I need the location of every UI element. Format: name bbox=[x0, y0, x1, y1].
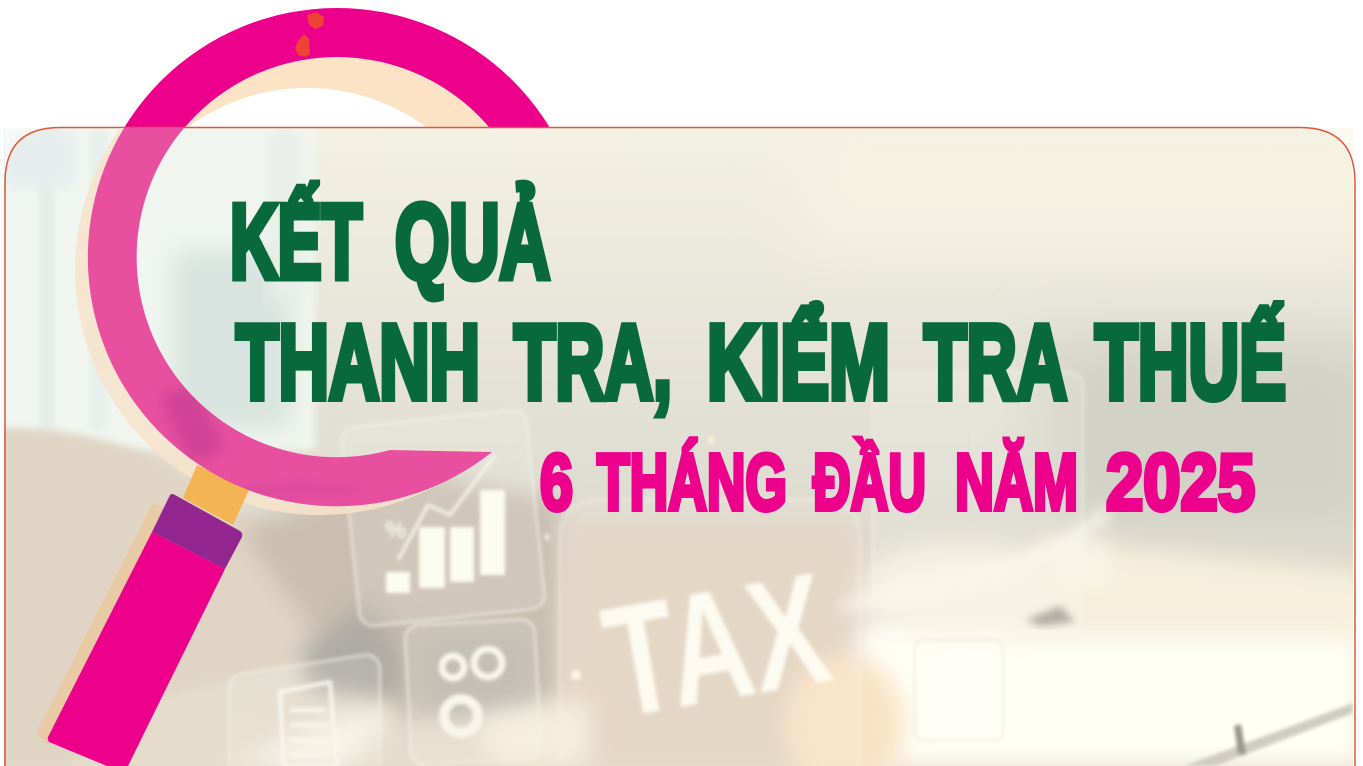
handle body bbox=[48, 532, 225, 766]
handle shadow bbox=[36, 503, 170, 745]
glass icon: chart card bbox=[340, 409, 546, 627]
subtitle bbox=[540, 438, 1255, 526]
glass icon: document card bbox=[229, 655, 380, 766]
photo: warm top right tone bbox=[800, 120, 1363, 250]
photo: brown tones behind tax card bbox=[560, 520, 860, 766]
magnifier ring top: pink band bbox=[124, 8, 550, 127]
magnifier shadow inside panel bbox=[75, 128, 486, 516]
title line 2: THANH bbox=[236, 304, 480, 422]
photo: white light at bottom left bbox=[230, 705, 400, 766]
panel corner tint bbox=[4, 128, 1353, 183]
clipboard edge bbox=[1184, 703, 1353, 766]
photo: pale window at left bbox=[0, 120, 315, 450]
subtitle: 2025 bbox=[1106, 438, 1255, 526]
magnifier ring inside panel bbox=[88, 128, 492, 506]
glass icon: gears card bbox=[404, 619, 542, 765]
blurred dark binder detail bbox=[1026, 606, 1075, 626]
subtitle: ĐẦU bbox=[813, 438, 926, 526]
rising glow line and bars bbox=[840, 505, 1110, 612]
subtitle: THÁNG bbox=[597, 438, 787, 526]
photo: grey wall at right bbox=[1040, 340, 1363, 530]
photo: dark mid shadows bbox=[240, 470, 560, 720]
title line 2 bbox=[236, 304, 1286, 422]
title line 2: KIỂM bbox=[707, 304, 890, 422]
subtitle: NĂM bbox=[955, 438, 1078, 526]
title line 2: TRA, bbox=[514, 304, 672, 422]
tax lettering: TAX bbox=[592, 540, 841, 752]
handle collar bbox=[152, 494, 242, 569]
title line 1 bbox=[230, 182, 550, 301]
red paint marks on ring bbox=[295, 12, 324, 57]
subtitle: 6 bbox=[540, 438, 573, 526]
magnifier neck bbox=[183, 465, 249, 525]
magnifier ring top: beige shadow bbox=[185, 57, 489, 127]
title line 2: TRA bbox=[924, 304, 1067, 422]
title line 1: QUẢ bbox=[395, 182, 550, 301]
title line 1: KẾT bbox=[230, 183, 362, 301]
photo: sparkles bbox=[544, 437, 714, 680]
photo: hand bbox=[4, 424, 301, 714]
glass icon: tax card bbox=[560, 500, 860, 766]
photo: bright paper and glow at bottom right bbox=[849, 618, 1353, 766]
glass icon: chart card: % bbox=[385, 517, 406, 544]
glass icon: people card bbox=[872, 371, 1084, 558]
glass icon: small card bbox=[915, 640, 1003, 740]
clip on clipboard bbox=[1234, 724, 1246, 754]
